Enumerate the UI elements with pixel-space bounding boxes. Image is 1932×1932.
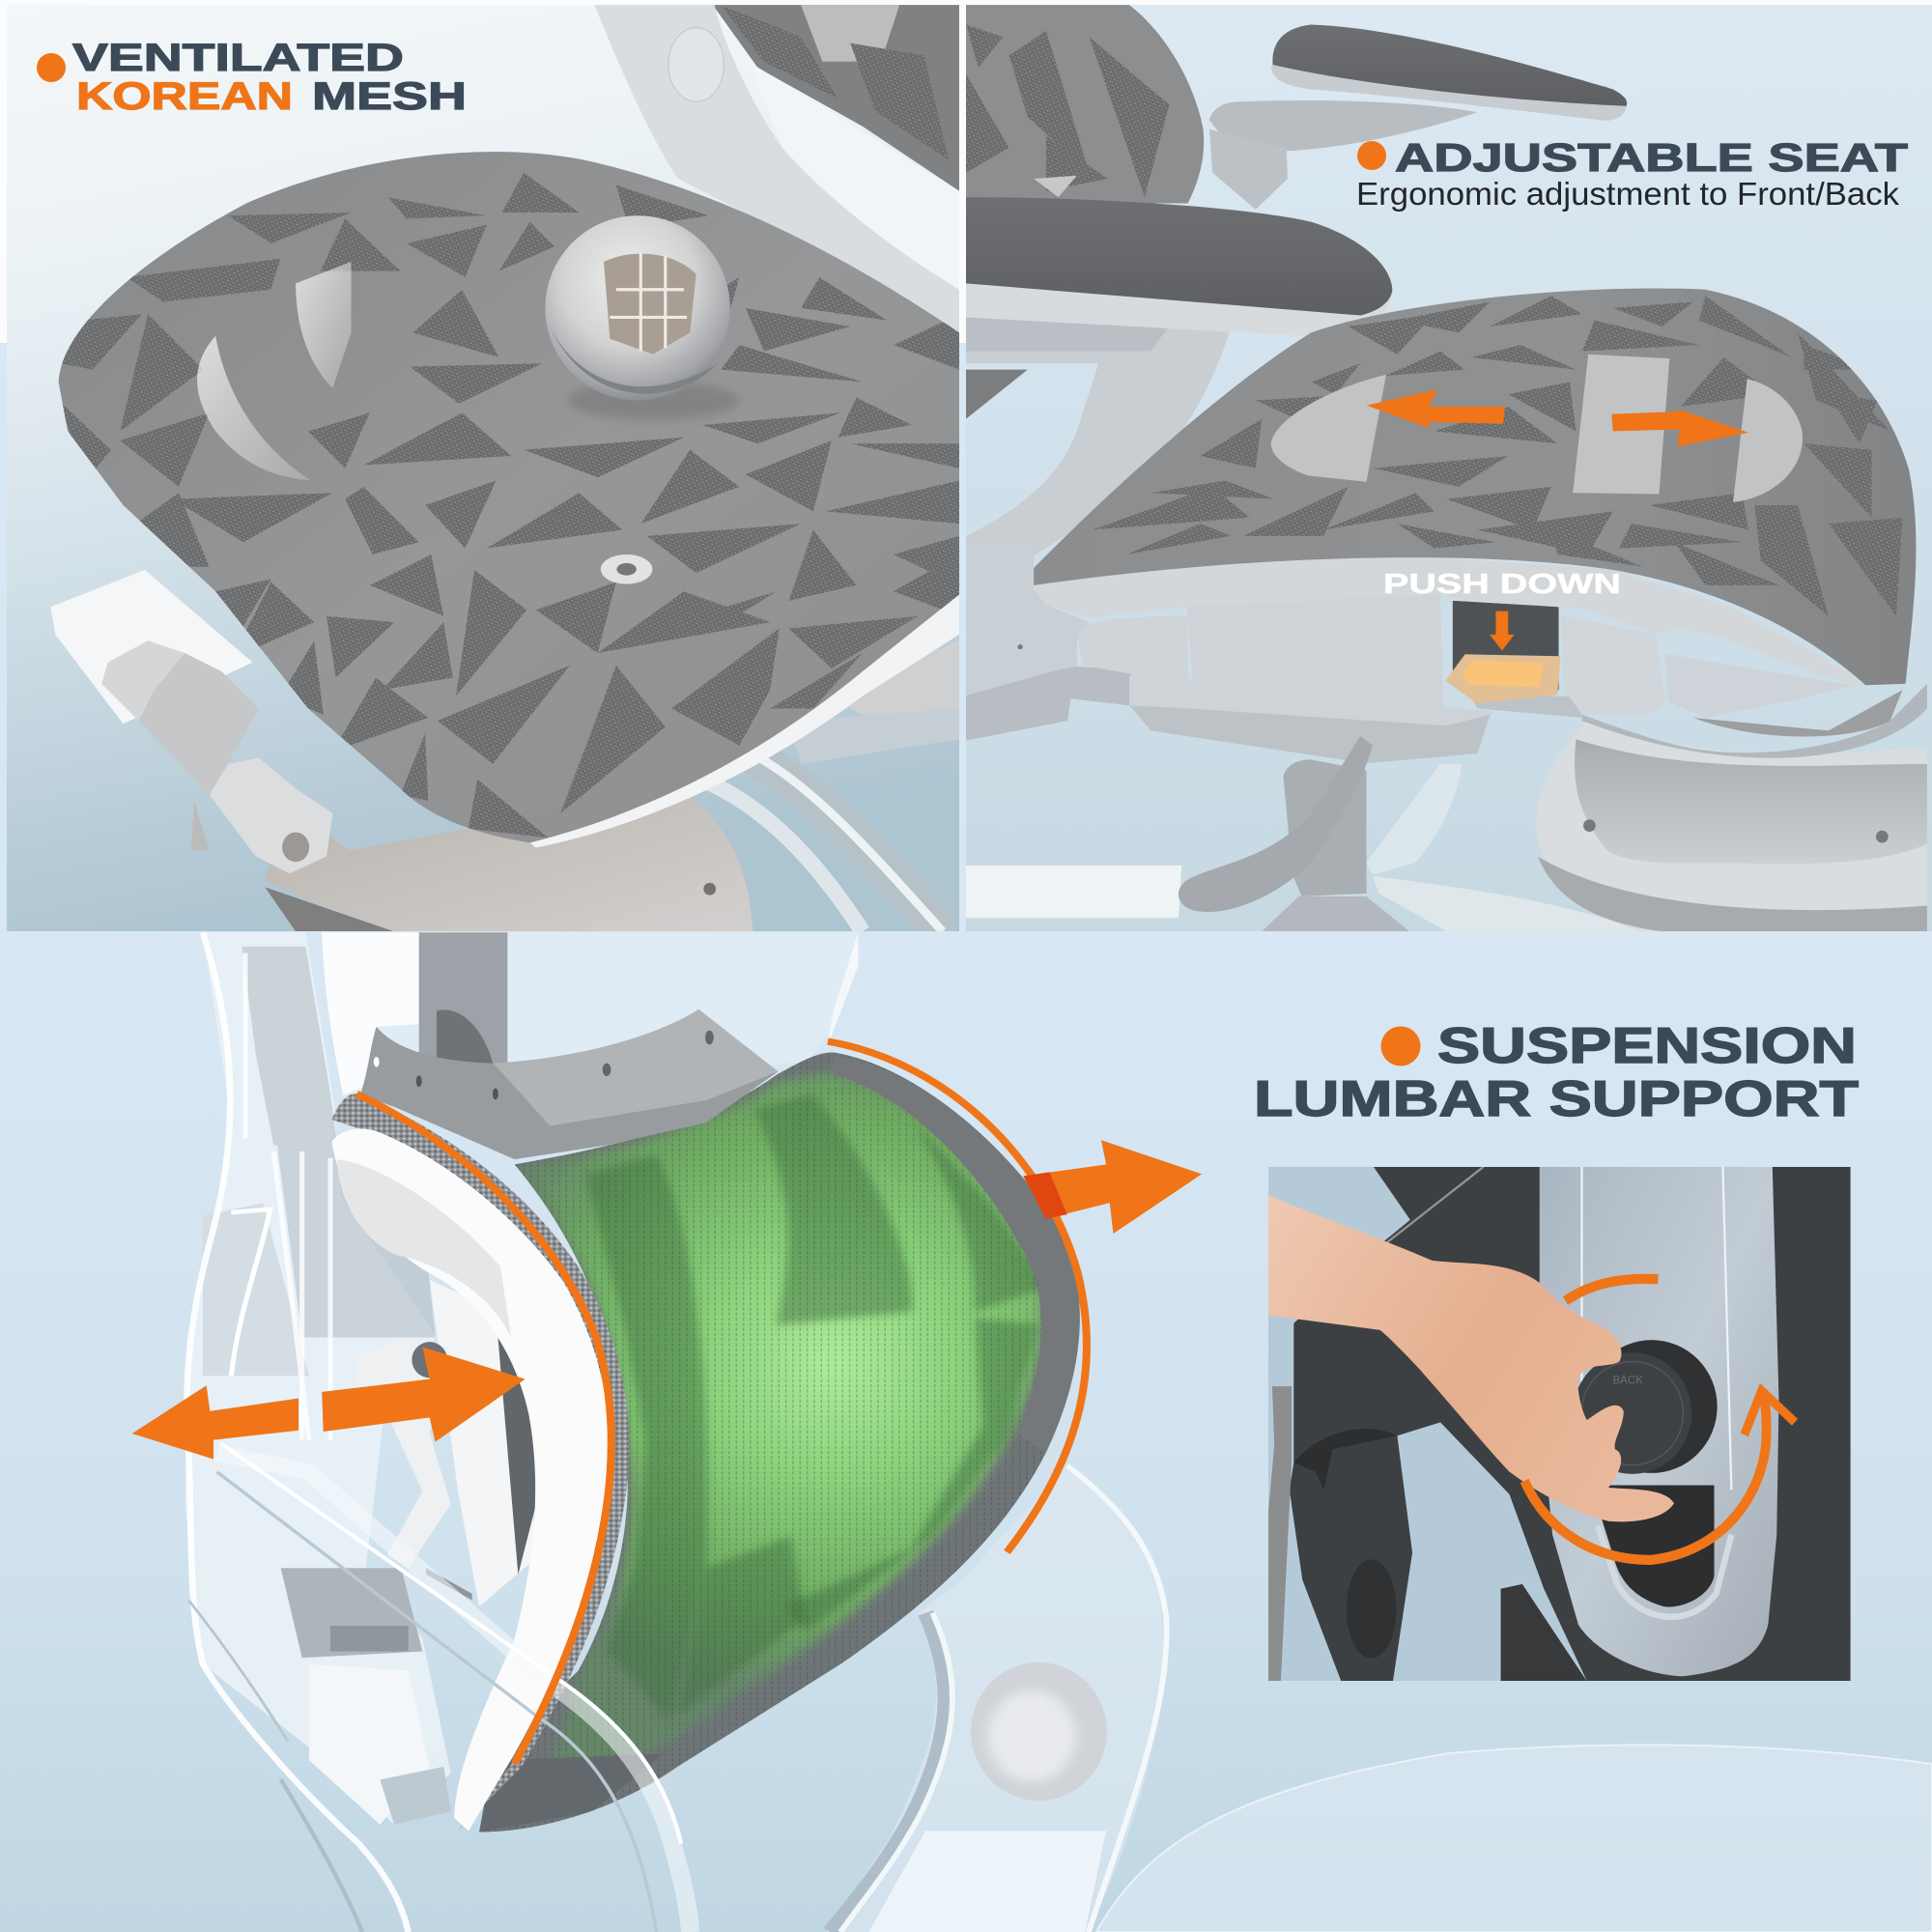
gas lift column xyxy=(1283,759,1367,896)
dark slot xyxy=(1591,1486,1715,1606)
heading: adjustable seat: ADJUSTABLE SEAT xyxy=(1395,135,1908,180)
right glass frame xyxy=(826,1465,1167,1932)
white seat ring xyxy=(331,1094,629,1831)
woven darker bands xyxy=(585,1094,1049,1721)
label: push down: PUSH DOWN xyxy=(1383,569,1621,600)
woven triangle pattern xyxy=(1093,296,1902,616)
mesh seat xyxy=(59,152,959,848)
heading: adjustable seat: Ergonomic adjustment to Front/Back xyxy=(1356,176,1900,212)
arrow: slide forward xyxy=(1611,409,1748,446)
base legs left xyxy=(1268,1386,1292,1682)
brushed aluminium plate xyxy=(1540,1167,1778,1676)
lumbar illustration xyxy=(132,932,1202,1932)
seat rim xyxy=(529,594,959,848)
heading: suspension lumbar support xyxy=(1254,1018,1859,1127)
mesh behind xyxy=(1501,1584,1587,1682)
arrow: outward push xyxy=(1023,1140,1202,1234)
right underside and chrome base xyxy=(708,640,959,931)
heading: ventilated korean mesh: KOREAN xyxy=(76,75,293,118)
chrome ball xyxy=(545,215,739,420)
clear diagonal band xyxy=(217,1443,691,1932)
left glass frame xyxy=(185,932,451,1932)
orange curve: front edge xyxy=(356,1094,611,1764)
control knob xyxy=(1573,1340,1718,1474)
mesh seat top xyxy=(1034,289,1916,685)
seat rim xyxy=(1034,554,1860,687)
lumbar mesh with green glow xyxy=(479,1053,1080,1832)
orange arrowhead xyxy=(1745,1391,1795,1435)
base plate xyxy=(1129,668,1492,763)
orange curve: rear edge xyxy=(828,1041,1087,1552)
hinge xyxy=(101,640,332,873)
lower frame xyxy=(966,328,1229,555)
left bracket and plate xyxy=(966,541,1188,741)
arrow: slide back xyxy=(1367,389,1505,428)
armrest disc under seat xyxy=(1536,718,1927,931)
glass disc at bottom right xyxy=(1096,1745,1932,1932)
sliding highlights xyxy=(1271,355,1803,502)
height lever xyxy=(1179,736,1373,912)
heading: ventilated korean mesh: VENTILATED xyxy=(72,37,404,79)
inner white linkage xyxy=(355,1280,539,1606)
wheel base bands xyxy=(966,866,1644,931)
center screw highlight xyxy=(601,554,652,584)
heading: ventilated korean mesh xyxy=(37,37,467,118)
translucent base leg xyxy=(1367,764,1462,875)
arrow: double headed left right xyxy=(132,1347,526,1460)
clear top plate xyxy=(322,932,858,1100)
control knob: BACK xyxy=(1612,1374,1643,1387)
heading: suspension lumbar support: SUSPENSION xyxy=(1437,1018,1857,1074)
near armrest xyxy=(966,197,1392,352)
woven triangle pattern xyxy=(59,173,959,838)
heading: ventilated korean mesh: MESH xyxy=(312,75,467,118)
upper armrest xyxy=(1209,25,1627,210)
heading: suspension lumbar support: LUMBAR SUPPORT xyxy=(1254,1071,1859,1127)
back frame and mesh xyxy=(594,5,959,345)
arrow: push down xyxy=(1490,611,1515,650)
specular highlights xyxy=(197,336,311,480)
metal spine xyxy=(419,932,507,1065)
hand xyxy=(1268,1195,1674,1521)
lumbar adjustment button xyxy=(971,1662,1107,1801)
panel: ventilated korean mesh xyxy=(7,5,959,931)
chair back mesh xyxy=(966,5,1204,203)
panel: knob inset photo xyxy=(1268,1167,1851,1682)
seat pan xyxy=(265,792,753,931)
dark chair frame xyxy=(1290,1167,1851,1682)
seat underside blocks xyxy=(1186,594,1927,758)
white lever plate xyxy=(50,570,252,724)
panel: lumbar support scene xyxy=(0,931,1932,1932)
seat release button xyxy=(1445,654,1560,703)
heading: adjustable seat xyxy=(1356,135,1908,212)
panel: adjustable seat xyxy=(966,5,1932,931)
orange rotation arc bottom xyxy=(1524,1395,1767,1560)
orange rotation arc top xyxy=(1566,1279,1658,1301)
grey collar xyxy=(360,1009,779,1159)
